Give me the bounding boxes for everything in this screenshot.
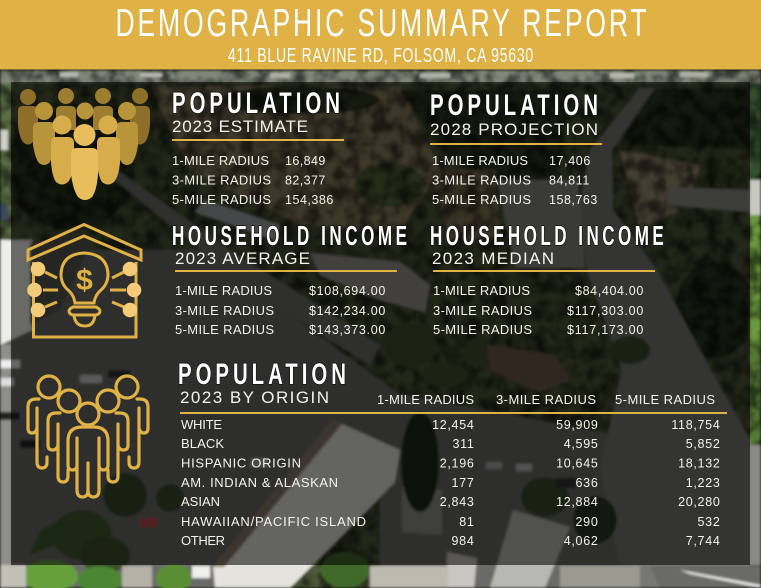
table values: 5-mile radius: 532 <box>698 515 720 529</box>
table values: 3-mile radius: 10,645 <box>556 456 598 470</box>
data rows: $108,694.00 <box>309 284 386 298</box>
data rows: 1-MILE RADIUS <box>175 283 272 298</box>
data rows: 3-MILE RADIUS <box>432 172 531 188</box>
data rows <box>175 283 386 337</box>
data rows: 5-MILE RADIUS <box>433 322 532 337</box>
heading: HOUSEHOLD INCOME <box>430 220 664 251</box>
panel: household income 2023 median <box>430 220 664 337</box>
icon: crowd of people <box>18 88 150 200</box>
data rows: 5-MILE RADIUS <box>432 192 531 207</box>
table row labels: AM. INDIAN & ALASKAN <box>181 475 338 490</box>
table values: 1-mile radius: 2,843 <box>440 495 474 509</box>
table column headers: 5-MILE RADIUS <box>615 392 715 407</box>
table row labels: HAWAIIAN/PACIFIC ISLAND <box>181 514 366 529</box>
data rows: $142,234.00 <box>309 304 386 318</box>
data rows: 1-MILE RADIUS <box>433 283 530 298</box>
table values: 5-mile radius: 1,223 <box>686 476 720 490</box>
table values: 1-mile radius: 12,454 <box>432 418 474 432</box>
data rows: 1-MILE RADIUS <box>172 153 269 168</box>
subheading: 2028 PROJECTION <box>430 120 598 139</box>
icon: house with light bulb and dollar sign <box>27 224 141 337</box>
heading: POPULATION <box>172 87 340 120</box>
subheading: 2023 AVERAGE <box>175 249 310 268</box>
data rows: 5-MILE RADIUS <box>175 322 274 337</box>
data rows: 84,811 <box>549 174 590 188</box>
data rows: 1-MILE RADIUS <box>432 153 528 168</box>
table values: 1-mile radius: 984 <box>452 534 474 548</box>
data rows: $117,303.00 <box>567 304 644 318</box>
data rows: 158,763 <box>549 193 598 207</box>
table values: 3-mile radius: 4,062 <box>564 534 598 548</box>
subheading: 2023 MEDIAN <box>432 249 554 268</box>
table row labels: BLACK <box>181 436 224 451</box>
table values: 5-mile radius: 18,132 <box>678 456 720 470</box>
table values: 3-mile radius: 290 <box>576 515 598 529</box>
icon: outlined group of people <box>28 376 148 497</box>
table row labels: HISPANIC ORIGIN <box>181 456 301 470</box>
heading: HOUSEHOLD INCOME <box>172 220 407 251</box>
table values: 5-mile radius <box>671 418 720 548</box>
table column headers: 1-MILE RADIUS <box>377 392 474 407</box>
table values: 1-mile radius: 81 <box>459 515 474 529</box>
data rows: 5-MILE RADIUS <box>172 192 271 207</box>
heading: POPULATION <box>430 89 598 122</box>
table values: 5-mile radius: 5,852 <box>686 437 720 451</box>
table values: 1-mile radius: 2,196 <box>440 456 474 470</box>
table row labels: WHITE <box>181 417 222 432</box>
table column headers: 3-MILE RADIUS <box>496 392 596 407</box>
translucent dark panel <box>11 82 750 565</box>
table values: 3-mile radius: 636 <box>576 476 598 490</box>
table values: 3-mile radius: 59,909 <box>556 418 598 432</box>
data rows <box>432 153 598 207</box>
data rows: 3-MILE RADIUS <box>175 303 274 318</box>
table row labels: ASIAN <box>181 494 220 509</box>
table values: 5-mile radius: 118,754 <box>671 418 720 432</box>
table row labels: OTHER <box>181 533 225 548</box>
table values: 3-mile radius: 4,595 <box>564 437 598 451</box>
panel: population 2023 estimate <box>172 87 344 207</box>
panel: population 2023 by origin <box>178 358 727 548</box>
title: DEMOGRAPHIC SUMMARY REPORT <box>116 2 647 45</box>
table values: 1-mile radius: 311 <box>452 437 474 451</box>
table values: 3-mile radius: 12,884 <box>556 495 598 509</box>
panel: household income 2023 average <box>172 220 407 337</box>
data rows: 3-MILE RADIUS <box>433 303 532 318</box>
data rows: 82,377 <box>285 174 326 188</box>
table values: 5-mile radius: 20,280 <box>678 495 720 509</box>
data rows: $143,373.00 <box>309 323 386 337</box>
data rows: 3-MILE RADIUS <box>172 172 271 188</box>
data rows: $84,404.00 <box>575 284 644 298</box>
data rows: $117,173.00 <box>567 323 644 337</box>
table values: 5-mile radius: 7,744 <box>686 534 720 548</box>
heading: POPULATION <box>178 358 346 391</box>
table values: 3-mile radius <box>556 418 598 548</box>
data rows: 17,406 <box>549 154 591 168</box>
subheading: 2023 BY ORIGIN <box>180 388 329 407</box>
panel: population 2028 projection <box>430 89 602 207</box>
data rows <box>433 283 644 337</box>
subheading: 2023 ESTIMATE <box>172 117 308 136</box>
header banner <box>0 0 761 70</box>
table values: 1-mile radius: 177 <box>452 476 474 490</box>
table column headers <box>377 392 715 407</box>
dollar sign: $ <box>76 264 93 297</box>
address subtitle: 411 BLUE RAVINE RD, FOLSOM, CA 95630 <box>228 43 533 67</box>
data rows <box>172 153 334 207</box>
data rows: 154,386 <box>285 193 334 207</box>
data rows: 16,849 <box>285 154 326 168</box>
table values: 1-mile radius <box>432 418 474 548</box>
table row labels <box>181 417 366 548</box>
